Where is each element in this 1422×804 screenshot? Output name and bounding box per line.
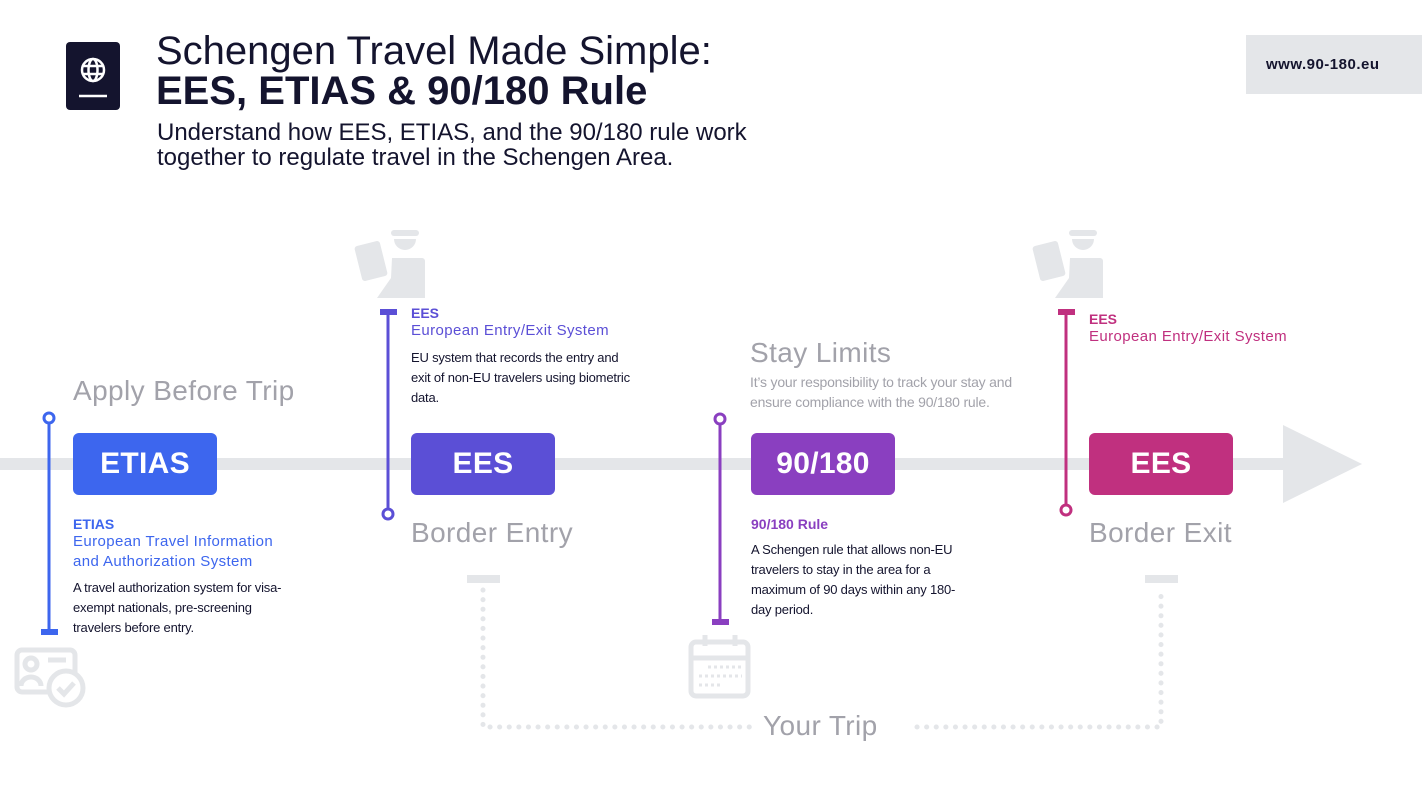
connector EES entry — [380, 309, 397, 519]
connector 90/180 — [712, 414, 729, 625]
text block EES entry: European Entry/Exit System — [411, 322, 609, 339]
url badge: www.90-180.eu — [1266, 56, 1380, 73]
subtitle: together to regulate travel in the Schengen Area. — [157, 144, 673, 171]
heading: stay limits: Stay Limits — [750, 337, 891, 368]
text stay limits — [750, 374, 1012, 410]
text block EES exit: European Entry/Exit System — [1089, 328, 1287, 345]
text block EES entry — [411, 305, 630, 405]
text block 90/180 — [751, 516, 955, 617]
heading: apply before trip: Apply Before Trip — [73, 375, 295, 406]
subtitle — [157, 119, 747, 171]
box EES exit: EES — [1131, 447, 1191, 480]
url badge — [1246, 35, 1422, 94]
text block EES entry: EES — [411, 305, 439, 321]
text block ETIAS: travelers before entry. — [73, 620, 194, 635]
box EES entry — [411, 433, 555, 495]
text stay limits: ensure compliance with the 90/180 rule. — [750, 394, 990, 410]
text block 90/180: 90/180 Rule — [751, 516, 828, 532]
icon: calendar — [691, 635, 748, 696]
dotted trip path — [467, 575, 1178, 727]
text block ETIAS: exempt nationals, pre-screening — [73, 600, 252, 615]
title: EES, ETIAS & 90/180 Rule — [156, 69, 647, 113]
box EES exit — [1089, 433, 1233, 495]
text block EES exit: EES — [1089, 311, 1117, 327]
text block 90/180: travelers to stay in the area for a — [751, 562, 930, 577]
text block EES exit — [1089, 311, 1287, 345]
label: your trip: Your Trip — [763, 710, 878, 741]
title — [156, 29, 712, 113]
connector EES exit — [1058, 309, 1075, 515]
subtitle: Understand how EES, ETIAS, and the 90/180 rule work — [157, 119, 747, 146]
text block ETIAS: European Travel Information — [73, 533, 273, 550]
icon: passport — [66, 42, 120, 110]
text stay limits: It’s your responsibility to track your stay and — [750, 374, 1012, 390]
text block 90/180: day period. — [751, 602, 813, 617]
text block 90/180: maximum of 90 days within any 180- — [751, 582, 955, 597]
icon: officer entry — [354, 230, 425, 298]
timeline arrow — [0, 425, 1362, 503]
text block ETIAS — [73, 516, 281, 635]
icon: id card check — [17, 650, 83, 705]
title: Schengen Travel Made Simple: — [156, 29, 712, 73]
text block EES entry: EU system that records the entry and — [411, 350, 618, 365]
icon: officer exit — [1032, 230, 1103, 298]
text block ETIAS: and Authorization System — [73, 553, 253, 570]
text block EES entry: data. — [411, 390, 439, 405]
box 90/180 — [751, 433, 895, 495]
connector ETIAS — [41, 413, 58, 635]
heading: border entry: Border Entry — [411, 517, 573, 548]
text block ETIAS: A travel authorization system for visa- — [73, 580, 281, 595]
heading: border exit: Border Exit — [1089, 517, 1232, 548]
box ETIAS: ETIAS — [100, 447, 190, 480]
box 90/180: 90/180 — [776, 447, 870, 480]
box EES entry: EES — [453, 447, 513, 480]
box ETIAS — [73, 433, 217, 495]
text block 90/180: A Schengen rule that allows non-EU — [751, 542, 952, 557]
text block ETIAS: ETIAS — [73, 516, 114, 532]
text block EES entry: exit of non-EU travelers using biometric — [411, 370, 630, 385]
